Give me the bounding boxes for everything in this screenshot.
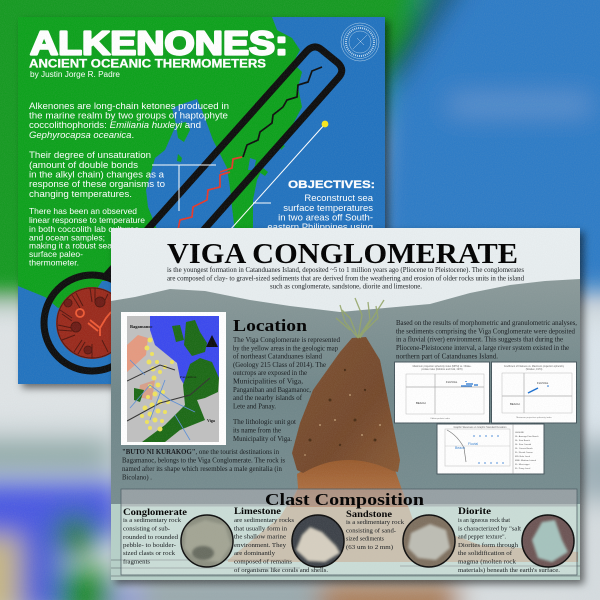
objectives text: surface temperatures xyxy=(283,203,373,214)
location text: Municipalities of Viga, xyxy=(233,378,303,386)
sea xyxy=(111,504,580,580)
main title: VIGA CONGLOMERATE xyxy=(167,238,518,270)
sandstone: Sandstone xyxy=(346,510,392,520)
location text: outcrops are exposed in the xyxy=(233,370,307,377)
chart: coefficient of flatness: FLUVIAL xyxy=(537,381,549,385)
diorite: Diorite xyxy=(458,507,491,517)
Buto ni Kurakog text: Bagamanoc, belongs to the Viga Conglomerate. The rock is xyxy=(122,458,285,464)
sandstone sample photo xyxy=(403,515,455,567)
objectives text: eastern Philippines using xyxy=(267,222,373,233)
location text: its name from the xyxy=(233,428,281,434)
chart: coefficient of flatness: (Stratten, 1974) xyxy=(526,368,543,371)
environment text xyxy=(396,319,577,360)
temperature response paragraph: in both coccolith lab cultures xyxy=(29,224,139,234)
diorite: the solidification of xyxy=(458,550,513,557)
environment text: in a fluvial (river) environment. This suggests that during the xyxy=(396,336,563,344)
diorite: and pepper texture". xyxy=(458,534,506,540)
objectives text xyxy=(268,194,374,228)
chart: graphic skewness: FL: Fluvial Coarse xyxy=(515,451,534,454)
map: blue sea regions xyxy=(18,17,385,384)
thermometer outline xyxy=(44,47,342,371)
diorite: Diorites form through xyxy=(458,542,519,549)
location text: Lete and Panay. xyxy=(233,404,276,410)
chart: coefficient of flatness: Coefficient of Flatness vs. Maximum projection sphericity xyxy=(504,365,565,368)
geologic map: Bagamanoc xyxy=(130,324,153,329)
conglomerate sample photo xyxy=(181,515,233,567)
chart: graphic skewness: FL: Proxy Local xyxy=(515,467,531,470)
map: green islets xyxy=(176,122,285,176)
location text: (Geology 215 Class of 2014). The xyxy=(233,362,326,369)
intro paragraph xyxy=(29,101,229,141)
diorite: materials) beneath the earth's surface. xyxy=(458,567,560,574)
fossil coccolith xyxy=(56,287,111,359)
chart: coefficient of flatness: BEACH xyxy=(510,402,520,406)
byline: by Justin Jorge R. Padre xyxy=(30,70,120,79)
diorite sample photo xyxy=(522,515,574,567)
conglomerate: pebble- to boulder- xyxy=(123,542,176,549)
intro paragraph: Alkenones are long-chain ketones produced in xyxy=(29,101,229,112)
conglomerate: consisting of sub- xyxy=(123,526,170,532)
chart: MPSI vs oblate-prolate: Maximum projection sphericity index (MPSI) vs. Oblate- xyxy=(413,365,472,368)
chart: MPSI vs oblate-prolate: BEACH xyxy=(416,401,426,405)
limestone: Limestone xyxy=(234,507,281,517)
temperature response paragraph: linear response to temperature xyxy=(29,215,145,225)
sandstone: (63 um to 2 mm) xyxy=(346,544,393,551)
chart: graphic skewness: Beach xyxy=(455,446,465,450)
temperature response paragraph: making it a robust sea xyxy=(29,240,112,250)
location text: The lithologic unit got xyxy=(233,419,296,426)
chart: coefficient of flatness: Maximum projection sphericity index xyxy=(516,416,553,419)
Buto ni Kurakog text: "BUTO NI KURAKOG", one the tourist destinations in xyxy=(122,449,280,456)
sandstone xyxy=(346,510,455,567)
environment text: northern part of Catanduanes Island. xyxy=(396,352,498,360)
conglomerate: rounded to rounded xyxy=(123,534,179,541)
objectives text: in two areas off South- xyxy=(278,212,373,224)
unsaturation paragraph: (amount of double bonds xyxy=(29,160,138,171)
location text: by the yellow areas in the geologic map xyxy=(233,346,339,352)
temperature response paragraph: and ocean samples; xyxy=(29,232,105,242)
temperature response paragraph xyxy=(29,206,145,268)
limestone: are dominantly xyxy=(234,550,276,557)
location text: Municipality of Viga. xyxy=(233,436,292,443)
Buto ni Kurakog text xyxy=(122,449,285,482)
location text xyxy=(233,337,341,443)
limestone: are sedimentary rocks xyxy=(234,517,295,524)
diorite: is characterized by "salt xyxy=(458,526,521,532)
environment text: the sediments comprising the Viga Conglomerate were deposited xyxy=(396,328,575,336)
conglomerate: Conglomerate xyxy=(123,508,187,518)
chart: graphic skewness: SL: Fine Coastal xyxy=(515,443,532,446)
limestone: environment. They xyxy=(234,542,287,549)
chart: MPSI vs oblate-prolate xyxy=(394,362,490,423)
diorite: magma (molten rock xyxy=(458,558,517,566)
limestone: of organisms like corals and shells. xyxy=(234,567,328,574)
environment text: Pliocene-Pleistocene interval, a large river system existed in the xyxy=(396,344,569,352)
intro text xyxy=(167,266,524,290)
unsaturation paragraph: Their degree of unsaturation xyxy=(29,150,151,161)
conglomerate: sized clasts or rock xyxy=(123,550,176,557)
geologic map: Viga xyxy=(207,418,215,423)
temperature response paragraph: There has been an observed xyxy=(29,206,137,216)
unsaturation paragraph: response of these organisms to xyxy=(29,179,165,190)
sea waves xyxy=(111,560,580,576)
intro text: such as conglomerate, sandstone, diorite and limestone. xyxy=(270,282,422,290)
poster: Viga Conglomerate xyxy=(111,228,580,580)
intro paragraph: the marine realm by two groups of haptophyte xyxy=(29,110,228,122)
temperature response paragraph: surface paleo- xyxy=(29,249,83,259)
sandstone: sized sediments xyxy=(346,536,385,542)
intro text: is the youngest formation in Catanduanes Island, deposited ~5 to 1 million years ago (Pliocene to Pleistocene). The conglomerates xyxy=(167,266,524,274)
geologic map: Panganiban xyxy=(180,375,197,379)
limestone: composed of remains xyxy=(234,558,293,566)
sandstone: consisting of sand- xyxy=(346,528,396,534)
sandstone: is a sedimentary rock xyxy=(346,519,405,526)
title: ALKENONES: xyxy=(30,26,288,62)
intro paragraph: Gephyrocapsa oceanica. xyxy=(29,130,134,141)
hills xyxy=(111,279,580,510)
location text: and the nearby islands of xyxy=(233,395,303,402)
plant on rock xyxy=(336,298,384,338)
conglomerate: fragments xyxy=(123,558,151,566)
objectives heading: OBJECTIVES: xyxy=(288,179,375,191)
unsaturation paragraph: changing temperatures. xyxy=(29,189,132,200)
Buto ni Kurakog text: named after its shape which resembles a male genitalia (in xyxy=(122,466,283,473)
location text: Panganiban and Bagamanoc, xyxy=(233,387,311,394)
location heading: Location xyxy=(233,316,308,335)
limestone xyxy=(234,507,344,574)
chart: coefficient of flatness xyxy=(492,362,576,423)
chart: graphic skewness: Graphic Skewness vs Graphic Standard Deviation xyxy=(453,426,507,429)
chart: graphic skewness xyxy=(437,424,544,474)
temperature response paragraph: thermometer. xyxy=(29,258,79,268)
intro paragraph: coccolithophorids: Emiliania huxleyi and xyxy=(29,120,201,131)
environment text: Based on the results of morphometric and granulometric analyses, xyxy=(396,319,577,327)
chart: graphic skewness: SL: Coarse Beach xyxy=(515,447,534,450)
unsaturation paragraph xyxy=(29,150,165,200)
university seal xyxy=(341,23,379,61)
chart: MPSI vs oblate-prolate: FLUVIAL xyxy=(446,380,458,384)
diorite: is an igneous rock that xyxy=(458,517,510,524)
subtitle: ANCIENT OCEANIC THERMOMETERS xyxy=(29,56,266,70)
limestone: the shallow marine xyxy=(234,534,286,540)
clast composition panel xyxy=(121,489,577,575)
chart: graphic skewness: SL: Fine Beach xyxy=(515,440,531,442)
chart: graphic skewness: SL: Average Fine Beach xyxy=(515,435,539,438)
chart: graphic skewness: LEGEND xyxy=(515,432,524,434)
diorite xyxy=(458,507,574,574)
chart: graphic skewness: FL: Mississippi xyxy=(515,464,530,466)
chart: graphic skewness: MSE: Medium Lateral xyxy=(515,459,537,462)
location text: The Viga Conglomerate is represented xyxy=(233,337,341,344)
limestone sample photo xyxy=(292,515,344,567)
clast heading: Clast Composition xyxy=(265,490,425,509)
chart: MPSI vs oblate-prolate: Oblate-prolate index xyxy=(430,417,451,420)
temperature zigzag xyxy=(178,67,322,230)
chart: graphic skewness: MD: Bahr Local xyxy=(515,455,531,458)
conglomerate: is a sedimentary rock xyxy=(123,517,182,524)
unsaturation paragraph: in the alkyl chain) changes as a xyxy=(29,170,165,180)
chart: graphic skewness: Fluvial xyxy=(468,442,478,446)
rock formation xyxy=(228,337,578,562)
location text: of northeast Catanduanes island xyxy=(233,354,323,360)
yellow dot marker xyxy=(322,121,328,127)
geologic map xyxy=(121,312,226,445)
Buto ni Kurakog text: Bicolano) . xyxy=(122,474,152,482)
poster: Alkenones xyxy=(18,17,385,384)
chart: MPSI vs oblate-prolate: prolate index (Dobkins and Folk, 1970) xyxy=(421,368,463,371)
conglomerate xyxy=(123,508,233,567)
intro text: are composed of clay- to gravel-sized sediments that are derived from the weathering and erosion of older rocks units in the island xyxy=(167,274,524,282)
callout lines xyxy=(152,124,325,230)
limestone: that usually form in xyxy=(234,526,287,532)
objectives text: Reconstruct sea xyxy=(304,193,374,204)
